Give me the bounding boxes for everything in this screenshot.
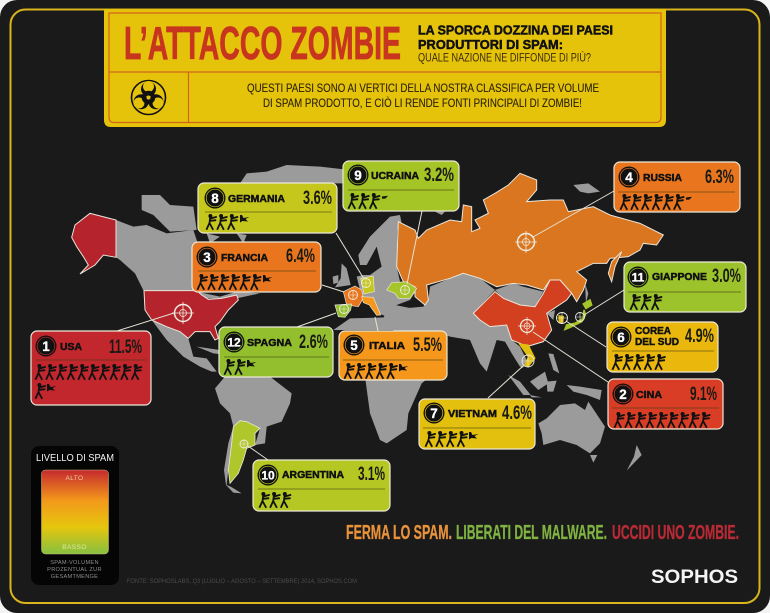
icon: biohazard xyxy=(130,80,167,114)
world map xyxy=(72,165,663,493)
country: South Korea xyxy=(558,315,564,323)
intro text: DI SPAM PRODOTTO, E CIÒ LI RENDE FONTI PRINCIPALI DI ZOMBIE! xyxy=(263,97,582,110)
country: Japan xyxy=(565,300,592,329)
panel: 5 Italia: 5.5% xyxy=(413,334,442,356)
panel: 7 Vietnam: 4.6% xyxy=(502,402,532,424)
subtitle: LA SPORCA DOZZINA DEI PAESI xyxy=(418,22,613,38)
panel: 2 Cina: 9.1% xyxy=(690,383,717,405)
country: Vietnam xyxy=(519,344,535,367)
panel: 3 Francia: 3 xyxy=(203,250,211,265)
panel: 4 Russia: RUSSIA xyxy=(643,172,682,184)
subtitle xyxy=(418,22,613,64)
panel: 2 Cina xyxy=(608,379,723,429)
panel: 1 USA: 1 xyxy=(42,339,50,354)
panel: 8 Germania: GERMANIA xyxy=(228,193,285,205)
panel: 7 Vietnam: VIETNAM xyxy=(448,408,497,420)
panel: 12 Spagna: 12 xyxy=(227,336,241,350)
panel: 8 Germania: 3.6% xyxy=(303,187,332,209)
panel: 5 Italia: 5 xyxy=(350,338,358,353)
country: China xyxy=(473,280,572,347)
panel: 4 Russia: 6.3% xyxy=(705,166,734,188)
legend: livello di spam xyxy=(31,446,119,585)
intro text: QUESTI PAESI SONO AI VERTICI DELLA NOSTRA CLASSIFICA PER VOLUME xyxy=(247,83,599,95)
panel: 5 Italia xyxy=(339,331,447,380)
panel: 3 Francia: 6.4% xyxy=(286,245,315,267)
tagline: FERMA LO SPAM. xyxy=(346,522,452,544)
intro text xyxy=(247,83,599,110)
panel: 11 Giappone xyxy=(624,262,746,312)
panel: 8 Germania: 8 xyxy=(211,191,219,206)
connector lines xyxy=(117,191,624,460)
panel: 1 USA: USA xyxy=(60,341,82,353)
panel: 6 Corea del Sud: 6 xyxy=(617,330,625,345)
header panel xyxy=(104,9,666,127)
panel: 9 Ucraina xyxy=(343,161,459,211)
panel: 7 Vietnam xyxy=(419,399,535,449)
panel: 4 Russia: 4 xyxy=(625,170,633,185)
panel: 10 Argentina: ARGENTINA xyxy=(282,469,344,481)
panel: 1 USA xyxy=(31,331,151,405)
country: USA xyxy=(72,213,238,340)
title: L’ATTACCO ZOMBIE xyxy=(124,17,401,69)
panel: 6 Corea del Sud xyxy=(607,322,718,372)
panel: 11 Giappone: GIAPPONE xyxy=(652,271,707,283)
legend: livello di spam: GESAMTMENGE xyxy=(51,574,98,580)
legend: livello di spam: SPAM-VOLUMEN xyxy=(50,560,99,566)
panel: 4 Russia xyxy=(614,162,740,212)
panel: 6 Corea del Sud: DEL SUD xyxy=(635,336,679,348)
legend: livello di spam: ALTO xyxy=(66,475,83,482)
subtitle: PRODUTTORI DI SPAM: xyxy=(418,37,563,52)
land: South America xyxy=(215,377,292,493)
tagline: LIBERATI DEL MALWARE. xyxy=(456,522,607,544)
panel: 9 Ucraina: 9 xyxy=(354,168,362,183)
legend: livello di spam: PROZENTUAL ZUR xyxy=(47,567,102,573)
targets xyxy=(172,231,584,448)
land: Asia xyxy=(380,183,600,380)
land: Europe xyxy=(333,215,440,330)
panel: 3 Francia xyxy=(192,242,321,292)
panel: 6 Corea del Sud: COREA xyxy=(635,325,671,337)
land: Oceania and islands xyxy=(508,353,642,471)
panel: 12 Spagna: 2.6% xyxy=(299,331,328,353)
panel: 10 Argentina: 3.1% xyxy=(358,463,385,485)
panel: 11 Giappone: 11 xyxy=(632,270,645,284)
panel: 9 Ucraina: UCRAINA xyxy=(371,170,419,182)
panel: 2 Cina: CINA xyxy=(636,389,662,401)
country: Argentina xyxy=(228,421,260,483)
subtitle: QUALE NAZIONE NE DIFFONDE DI PIÙ? xyxy=(418,52,591,64)
legend: livello di spam: BASSO xyxy=(62,544,87,551)
land: Americas and Greenland xyxy=(116,165,353,372)
countries: Europe xyxy=(335,276,417,317)
panel: 5 Italia: ITALIA xyxy=(369,340,405,352)
panel: 2 Cina: 2 xyxy=(619,387,627,402)
panel: 3 Francia: FRANCIA xyxy=(221,252,268,264)
panel: 8 Germania xyxy=(198,183,337,233)
panel: 10 Argentina: 10 xyxy=(261,468,275,482)
legend: livello di spam: LIVELLO DI SPAM xyxy=(36,452,114,464)
panel: 6 Corea del Sud: 4.9% xyxy=(685,325,714,347)
panel: 12 Spagna xyxy=(219,327,333,377)
tagline xyxy=(346,522,739,544)
panel: 12 Spagna: SPAGNA xyxy=(247,337,292,349)
panel: 11 Giappone: 3.0% xyxy=(712,265,741,287)
logo: Sophos: SOPHOS xyxy=(651,566,738,588)
country: Russia xyxy=(397,173,663,305)
land: Africa xyxy=(365,377,430,443)
panel: 9 Ucraina: 3.2% xyxy=(424,164,454,186)
panel: 1 USA: 11.5% xyxy=(109,336,142,358)
panel: 10 Argentina xyxy=(253,460,390,511)
source note: FONTE: SOPHOSLABS, Q3 (LUGLIO – AGOSTO – SETTEMBRE) 2014, SOPHOS.COM xyxy=(127,578,357,585)
panel: 7 Vietnam: 7 xyxy=(430,406,438,421)
